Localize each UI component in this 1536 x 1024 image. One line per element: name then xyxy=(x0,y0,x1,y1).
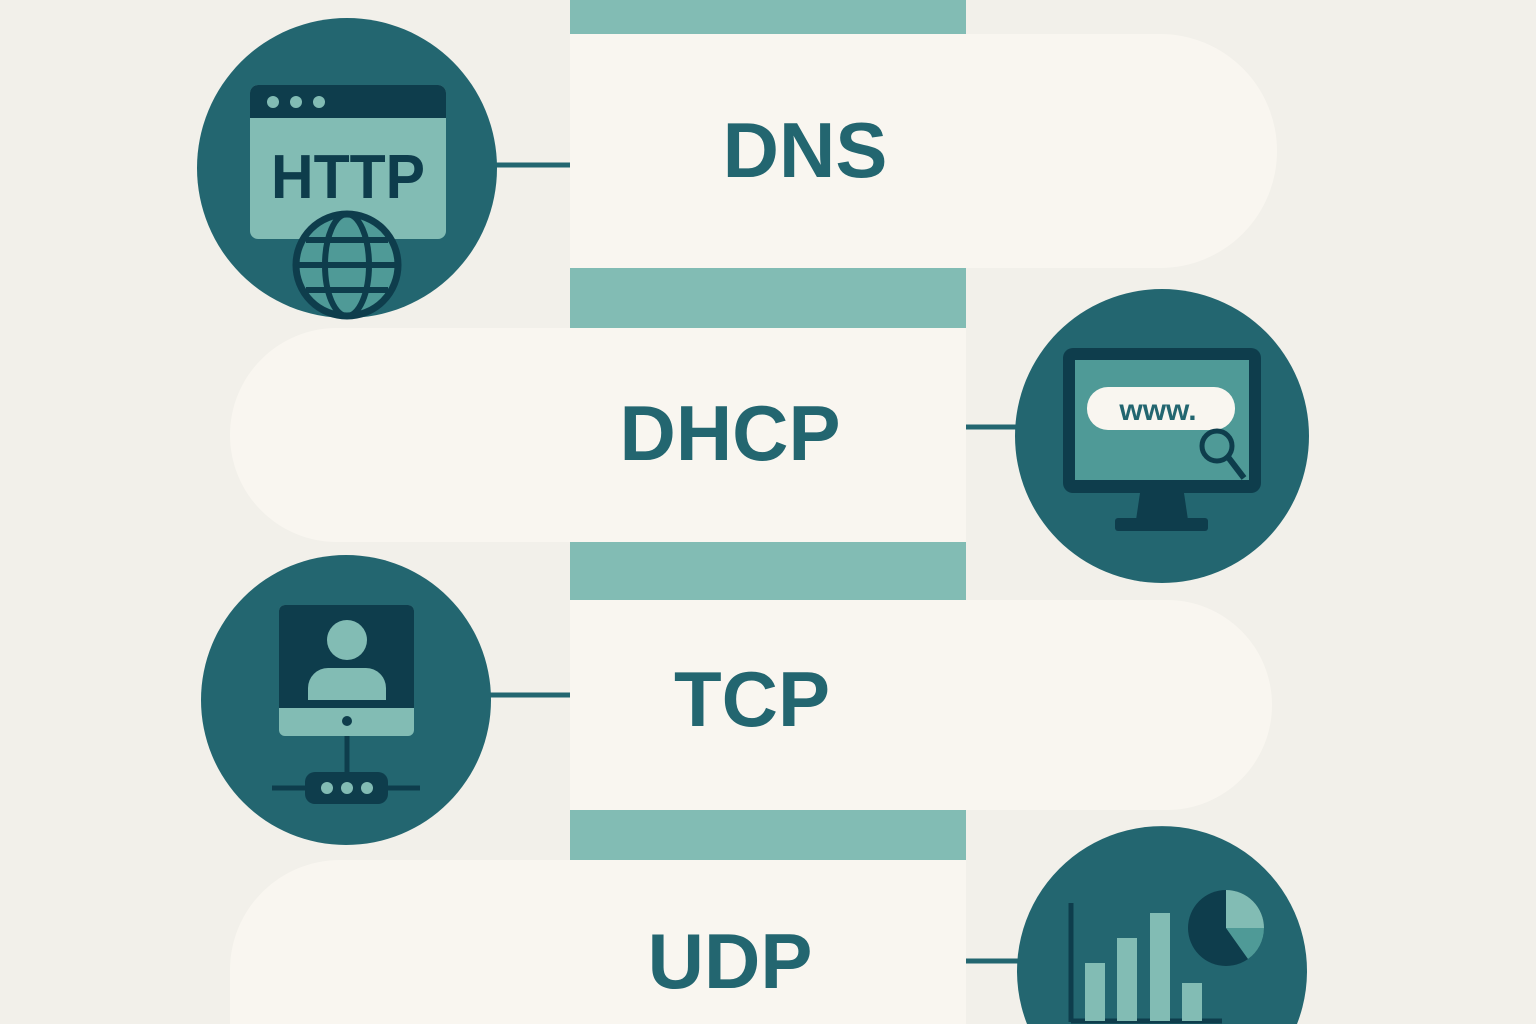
panel: TCP: TCP xyxy=(674,655,830,743)
panel: DNS: DNS xyxy=(723,106,887,194)
connector bars xyxy=(570,0,966,860)
icon: HTTP browser with globe: HTTP xyxy=(271,143,425,212)
icon: monitor www xyxy=(1015,289,1309,583)
panel: UDP xyxy=(230,860,966,1024)
icon: chart xyxy=(1017,826,1307,1024)
icon: monitor www: www. xyxy=(1118,394,1197,427)
icon: user computer network xyxy=(201,555,491,845)
panel: UDP: UDP xyxy=(648,917,812,1005)
panel: DHCP xyxy=(230,328,966,542)
panel: DHCP: DHCP xyxy=(619,389,841,477)
panel: DNS xyxy=(570,34,1277,268)
connector lines xyxy=(488,165,1020,961)
icon: HTTP browser with globe xyxy=(197,18,497,318)
panel: TCP xyxy=(570,600,1272,810)
